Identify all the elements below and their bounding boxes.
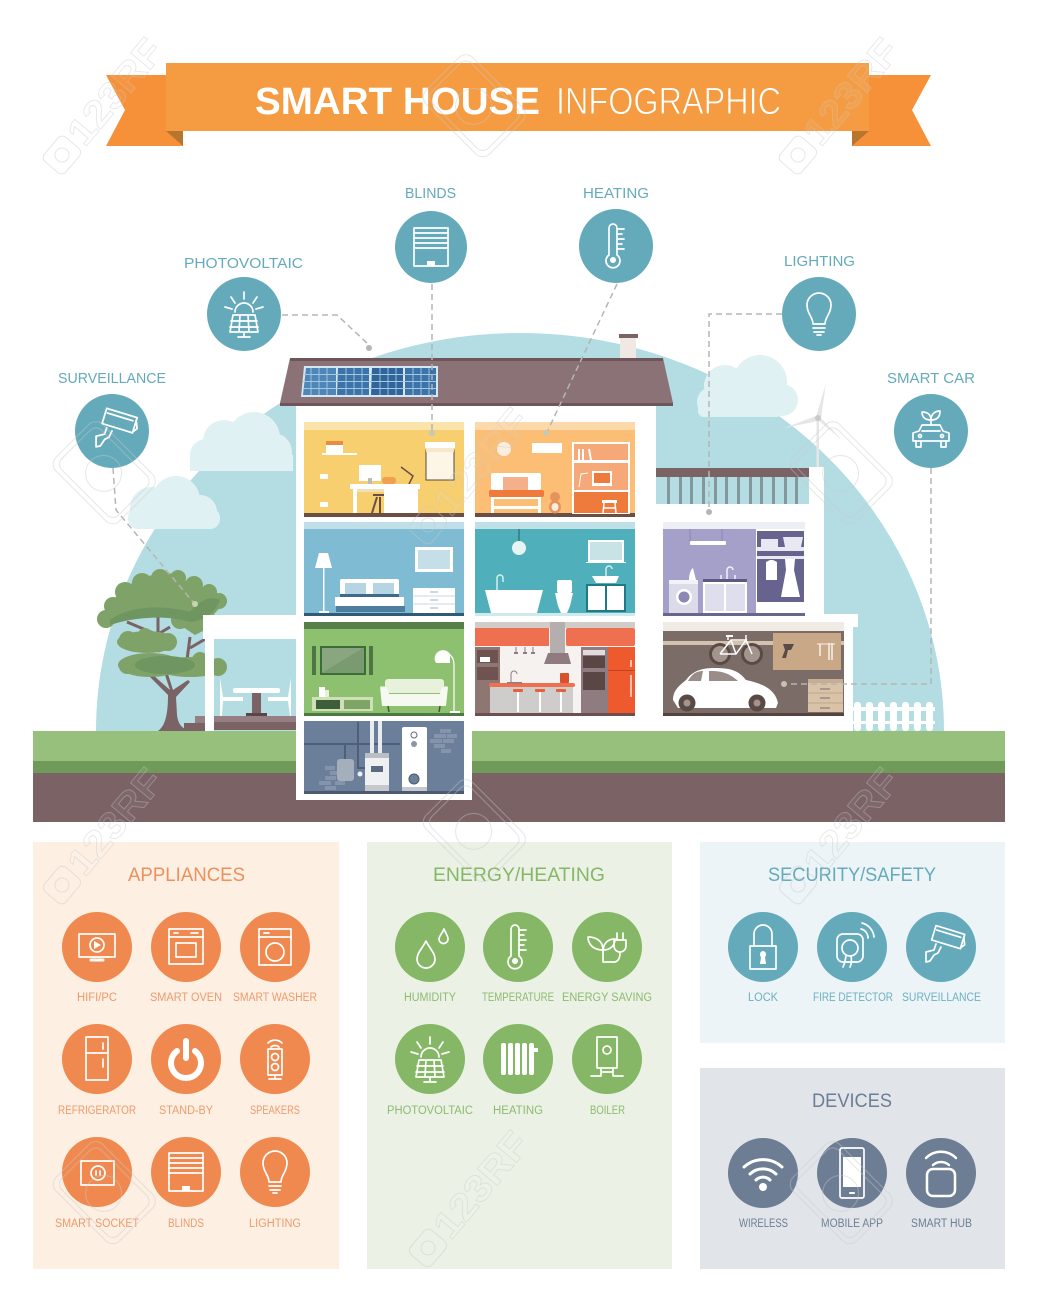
icon: fire detector [813, 912, 893, 1004]
tree [97, 569, 227, 731]
icon: photovoltaic [387, 1024, 473, 1117]
icon: boiler [572, 1024, 642, 1117]
room: blue bedroom [304, 522, 464, 616]
icon: wireless [728, 1138, 798, 1230]
icon: humidity [395, 912, 465, 1004]
icon: smart oven [150, 912, 222, 1004]
title text: SMART HOUSE [255, 81, 540, 123]
room: bedroom [475, 422, 635, 517]
icon: lock: LOCK [748, 992, 778, 1004]
icon: lock [728, 912, 798, 1004]
callout: photovoltaic: PHOTOVOLTAIC [184, 255, 303, 272]
callout: smart car [887, 370, 975, 468]
icon: energy saving: ENERGY SAVING [562, 992, 652, 1004]
callout: lighting: LIGHTING [784, 253, 855, 270]
icon: smart washer: SMART WASHER [233, 992, 317, 1004]
icon: smart hub [906, 1138, 976, 1230]
icon: smart oven: SMART OVEN [150, 992, 222, 1004]
clouds [128, 355, 798, 529]
icon: mobile app [817, 1138, 887, 1230]
heading: security/safety: SECURITY/SAFETY [768, 864, 936, 886]
icon: stand-by [151, 1024, 221, 1117]
panel: energy/heating [367, 842, 672, 1269]
icon: temperature [482, 912, 554, 1004]
icon: temperature: TEMPERATURE [482, 992, 554, 1004]
icon: smart socket [55, 1137, 139, 1230]
watermark overlay: 123RF [426, 401, 538, 524]
callout: heating [579, 185, 653, 283]
icon: heating [483, 1024, 553, 1117]
sky dome [96, 333, 944, 731]
room: kitchen [475, 622, 635, 716]
callout: blinds: BLINDS [405, 185, 456, 202]
watermark overlay: 123RF [60, 761, 172, 884]
heading: energy/heating: ENERGY/HEATING [433, 864, 605, 886]
icon: surveillance [902, 912, 981, 1004]
watermark overlay: 123RF [426, 1124, 538, 1247]
room: basement boiler room [304, 721, 464, 794]
room: office [304, 422, 464, 517]
roof [280, 358, 673, 406]
watermark overlay: 123RF [796, 761, 908, 884]
icon: smart washer [233, 912, 317, 1004]
fence [853, 702, 935, 731]
icon: boiler: BOILER [590, 1105, 625, 1117]
room: garage [663, 622, 844, 716]
icon: mobile app: MOBILE APP [821, 1218, 883, 1230]
callout: smart car: SMART CAR [887, 370, 975, 387]
callout: surveillance [58, 370, 166, 468]
icon: blinds [151, 1137, 221, 1230]
room: laundry [663, 522, 805, 616]
watermark overlay: 123RF [60, 31, 172, 154]
wind turbine [784, 383, 843, 468]
chimney [619, 334, 638, 360]
title light text: INFOGRAPHIC [556, 81, 781, 123]
icon: refrigerator: REFRIGERATOR [58, 1105, 136, 1117]
icon: humidity: HUMIDITY [404, 992, 456, 1004]
icon: hifi/pc [62, 912, 132, 1004]
icon: heating: HEATING [493, 1105, 543, 1117]
panel: devices [700, 1068, 1005, 1269]
heading: appliances: APPLIANCES [128, 864, 245, 886]
heading: devices: DEVICES [812, 1090, 892, 1112]
icon: blinds: BLINDS [168, 1218, 204, 1230]
icon: photovoltaic: PHOTOVOLTAIC [387, 1105, 473, 1117]
icon: speakers [240, 1024, 310, 1117]
house body [296, 405, 858, 800]
icon: stand-by: STAND-BY [159, 1105, 213, 1117]
room: living room [304, 622, 464, 716]
icon: smart hub: SMART HUB [911, 1218, 972, 1230]
icon: speakers: SPEAKERS [250, 1105, 300, 1117]
solar panels [301, 366, 438, 397]
icon: lighting: LIGHTING [249, 1218, 301, 1230]
connector lines [113, 284, 931, 687]
ground [33, 731, 1005, 822]
icon: fire detector: FIRE DETECTOR [813, 992, 893, 1004]
watermark overlay: 123RF [796, 31, 908, 154]
callout: lighting [782, 253, 856, 351]
icon: hifi/pc: HIFI/PC [77, 992, 117, 1004]
patio [184, 615, 296, 731]
room: bathroom [475, 522, 635, 616]
icon: surveillance: SURVEILLANCE [902, 992, 981, 1004]
icon: smart socket: SMART SOCKET [55, 1218, 139, 1230]
icon: refrigerator [58, 1024, 136, 1117]
icon: wireless: WIRELESS [739, 1218, 788, 1230]
panel: appliances [33, 842, 339, 1269]
panel: security/safety [700, 842, 1005, 1043]
callout: photovoltaic [184, 255, 303, 351]
callout: heating: HEATING [583, 185, 649, 202]
callout: blinds [395, 185, 467, 283]
icon: energy saving [562, 912, 652, 1004]
title banner [106, 63, 931, 146]
balcony railing [656, 468, 809, 504]
icon: lighting [240, 1137, 310, 1230]
callout: surveillance: SURVEILLANCE [58, 370, 166, 387]
